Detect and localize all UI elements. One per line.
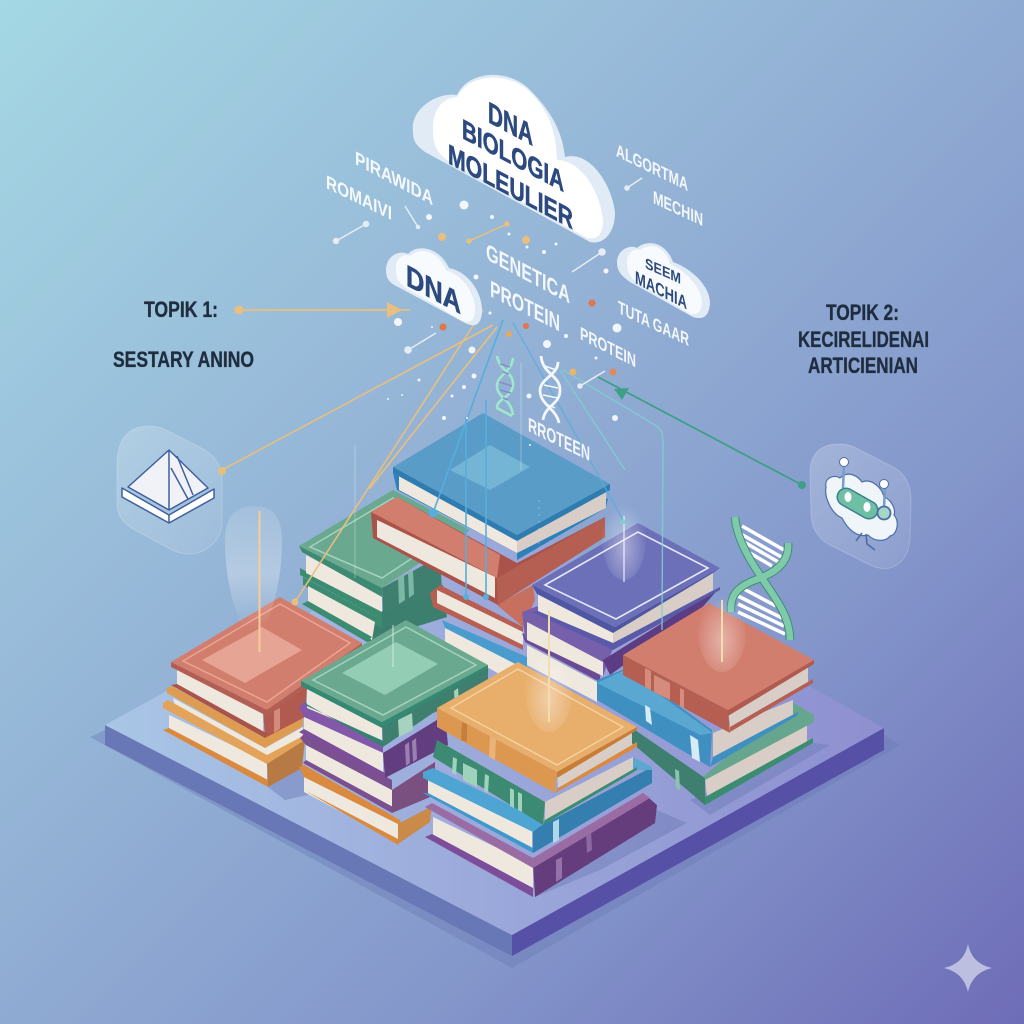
connector lines: blue <box>433 320 624 597</box>
label: topik 1 <box>113 297 254 372</box>
floating keywords: MECHIN <box>653 188 703 231</box>
floating keywords: PIRAWIDA <box>355 148 433 210</box>
icon: robot cloud <box>826 458 897 550</box>
floating keywords: TUTA GAAR <box>618 298 689 351</box>
connector lines: orange <box>222 310 497 602</box>
floating keywords <box>326 141 703 466</box>
glow: orange book <box>525 610 573 732</box>
label: topik 2: TOPIK 2: <box>826 300 899 325</box>
book stack shadows <box>268 743 830 897</box>
book stack: central under blue <box>371 413 610 690</box>
cloud text: DNA <box>488 95 533 152</box>
floating keywords: ROMAIVI <box>326 172 392 225</box>
book stack: red left <box>163 597 362 787</box>
cloud: DNA <box>386 248 482 325</box>
book stack: right <box>597 603 814 805</box>
cloud: main <box>413 75 615 243</box>
icon: small DNA helix green <box>497 356 513 416</box>
glow: red right book <box>698 592 746 672</box>
icon: pyramid <box>122 450 214 523</box>
cloud text <box>448 95 573 236</box>
platform <box>90 510 900 968</box>
book stack: green back <box>299 490 470 642</box>
icon: small DNA helix white <box>540 356 560 423</box>
icon: sparkle watermark <box>944 944 992 992</box>
floating keywords: PROTEIN <box>580 324 636 372</box>
floating keywords: ALGORTMA <box>616 141 688 196</box>
floating keywords: RROTEEN <box>528 414 590 466</box>
glow: indigo book <box>602 500 646 582</box>
arrow: topik 2 to protein <box>598 377 806 489</box>
floating keywords: GENETICA <box>486 239 570 309</box>
label: topik 2 <box>798 300 929 378</box>
connector dots <box>292 508 626 606</box>
faint vertical light lines <box>355 363 539 578</box>
small connector nodes <box>334 178 642 388</box>
book stack: green front <box>299 620 488 845</box>
book stack: orange front <box>423 662 657 897</box>
cloud: seem machia <box>617 243 710 318</box>
label: topik 2: ARTICIENIAN <box>808 353 918 378</box>
cloud text: MOLEULIER <box>448 139 573 236</box>
arrow: topik 1 to DNA <box>234 302 410 318</box>
cloud text: BIOLOGIA <box>462 114 564 199</box>
label: topik 2: KECIRELIDENAI <box>798 327 929 352</box>
cloud: seem machia: MACHIA <box>635 268 687 314</box>
glow: red left book <box>225 506 282 652</box>
icon panel: robot cloud <box>810 444 911 568</box>
cloud: seem machia: SEEM <box>645 256 681 288</box>
icon: DNA helix right <box>731 517 790 640</box>
label: topik 1: SESTARY ANINO <box>113 347 254 372</box>
label: topik 1: TOPIK 1: <box>144 297 218 322</box>
particles <box>387 200 622 446</box>
icon panel: pyramid <box>117 426 226 554</box>
connector lines: teal <box>560 370 663 630</box>
cloud: DNA: DNA <box>406 258 461 321</box>
glow: green book <box>392 625 394 667</box>
floating keywords: PROTEIN <box>490 276 560 337</box>
book stack: indigo and purple <box>522 523 720 702</box>
